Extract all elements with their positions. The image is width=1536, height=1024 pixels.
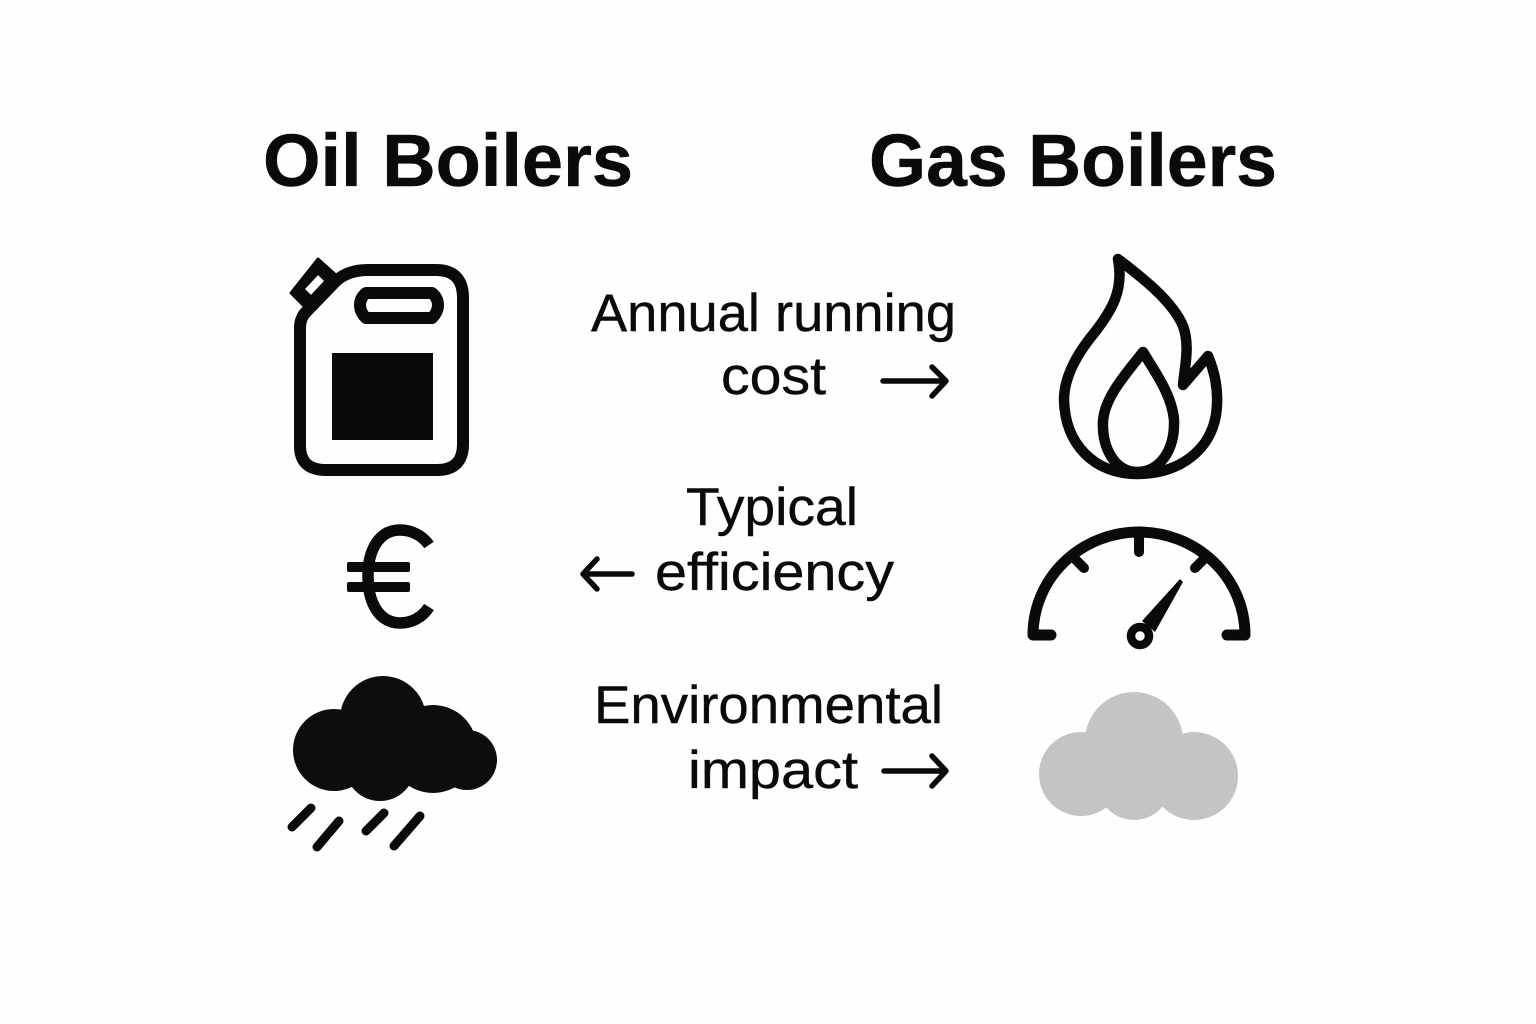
arrow: right, environmental impact xyxy=(884,756,946,786)
label: Environmental impact: Environmental xyxy=(594,676,943,735)
icon: flame xyxy=(1064,259,1217,474)
icon: oil jerry can xyxy=(291,259,463,470)
icon: dark rain cloud xyxy=(292,676,497,847)
heading: Gas Boilers: Gas Boilers xyxy=(869,119,1277,202)
label: Annual running cost xyxy=(591,284,956,406)
label: Typical efficiency xyxy=(655,478,895,602)
icon: euro sign xyxy=(347,530,429,623)
icon: light grey cloud xyxy=(1039,692,1238,820)
label: Typical efficiency: efficiency xyxy=(655,543,895,602)
label: Typical efficiency: Typical xyxy=(686,478,858,537)
label: Annual running cost: Annual running xyxy=(591,284,956,343)
heading: Oil Boilers: Oil Boilers xyxy=(263,119,633,202)
icon: gauge xyxy=(1033,532,1245,645)
label: Annual running cost: cost xyxy=(721,347,826,406)
label: Environmental impact xyxy=(594,676,943,800)
arrow: left, typical efficiency xyxy=(583,559,632,589)
arrow: right, annual running cost xyxy=(883,367,946,396)
label: Environmental impact: impact xyxy=(688,741,858,800)
